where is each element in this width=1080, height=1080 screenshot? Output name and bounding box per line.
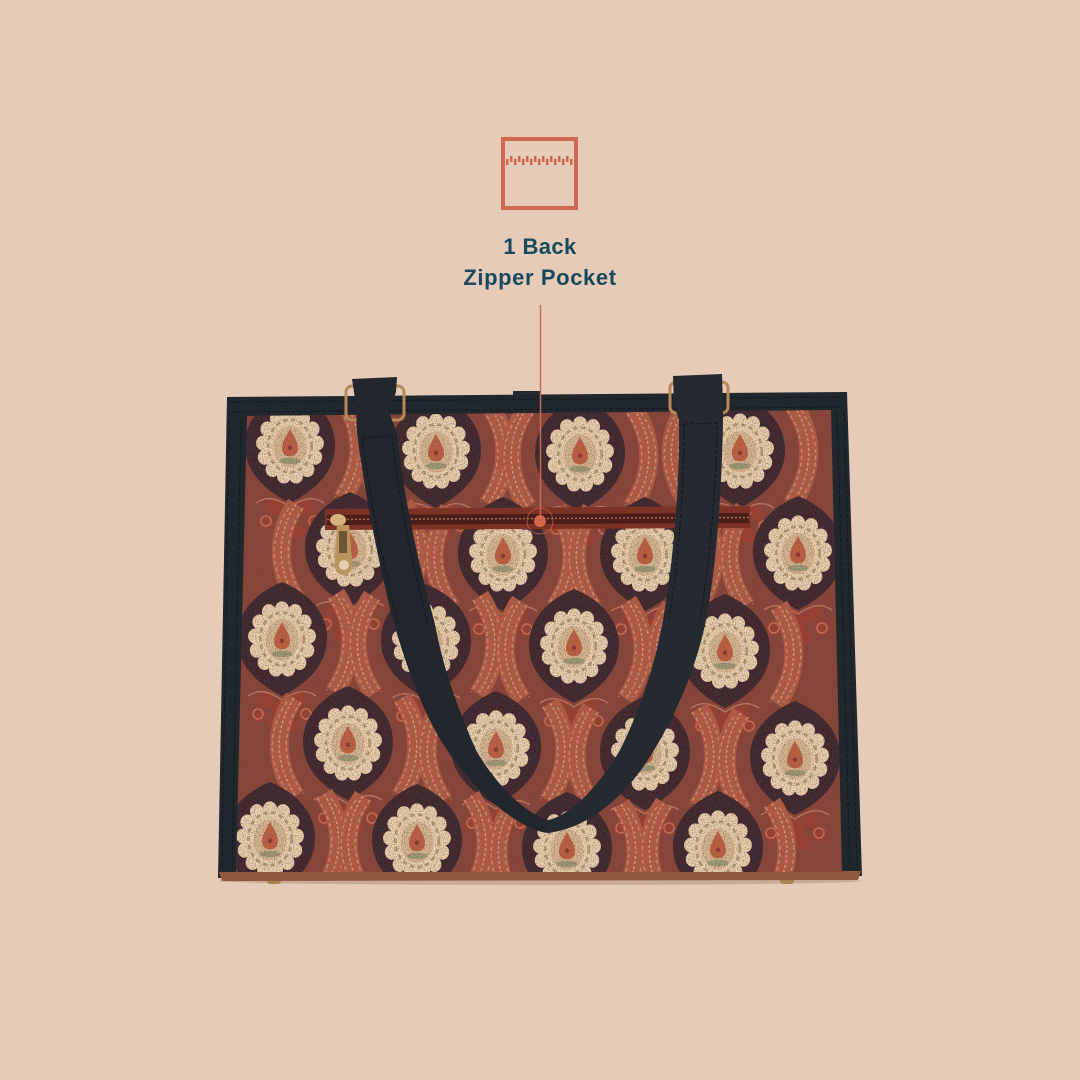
strap buckles (346, 382, 728, 420)
ground shadow (218, 877, 862, 885)
heading: 1 Back Zipper Pocket: 1 Back (503, 234, 577, 259)
callout line (540, 305, 542, 516)
bag leather frame (218, 392, 862, 878)
right strap (548, 374, 723, 833)
icon: back zipper pocket (503, 139, 576, 208)
frame stitching (222, 397, 857, 870)
bag top tab (513, 391, 540, 399)
tan base strip (219, 871, 861, 881)
heading: 1 Back Zipper Pocket: Zipper Pocket (463, 265, 617, 290)
zipper (325, 506, 751, 530)
left strap (352, 377, 548, 833)
handbag (218, 374, 862, 885)
tapestry panel (236, 410, 842, 872)
bag feet (267, 876, 794, 884)
strap stitching (362, 423, 717, 625)
zipper puller (330, 514, 352, 575)
callout dot (527, 508, 553, 534)
